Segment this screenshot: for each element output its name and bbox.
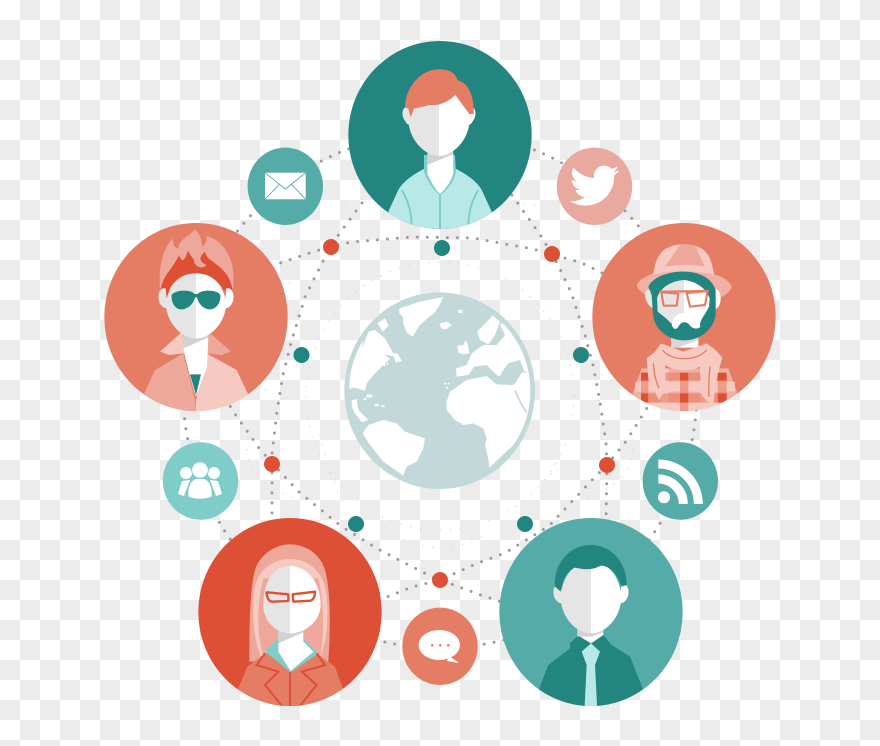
globe (344, 292, 540, 489)
artwork (104, 41, 776, 712)
icon: twitter bird (557, 148, 632, 225)
icon: chat bubble (402, 608, 478, 685)
connection nodes: teal (294, 240, 589, 532)
connection nodes: red (264, 239, 615, 588)
icon: rss feed (643, 442, 718, 520)
avatar: left man with flame hair and sunglasses (104, 223, 288, 413)
avatar: top man, teal circle (348, 41, 532, 237)
icon: group of people (163, 442, 238, 520)
avatar: bottom-right man in suit and tie (499, 518, 683, 712)
network of dotted connections (183, 132, 697, 648)
icon: email (248, 148, 323, 225)
avatar: right man with hat, beard and scarf (592, 223, 776, 415)
avatar: bottom-left woman with long hair and red glasses (198, 518, 382, 712)
